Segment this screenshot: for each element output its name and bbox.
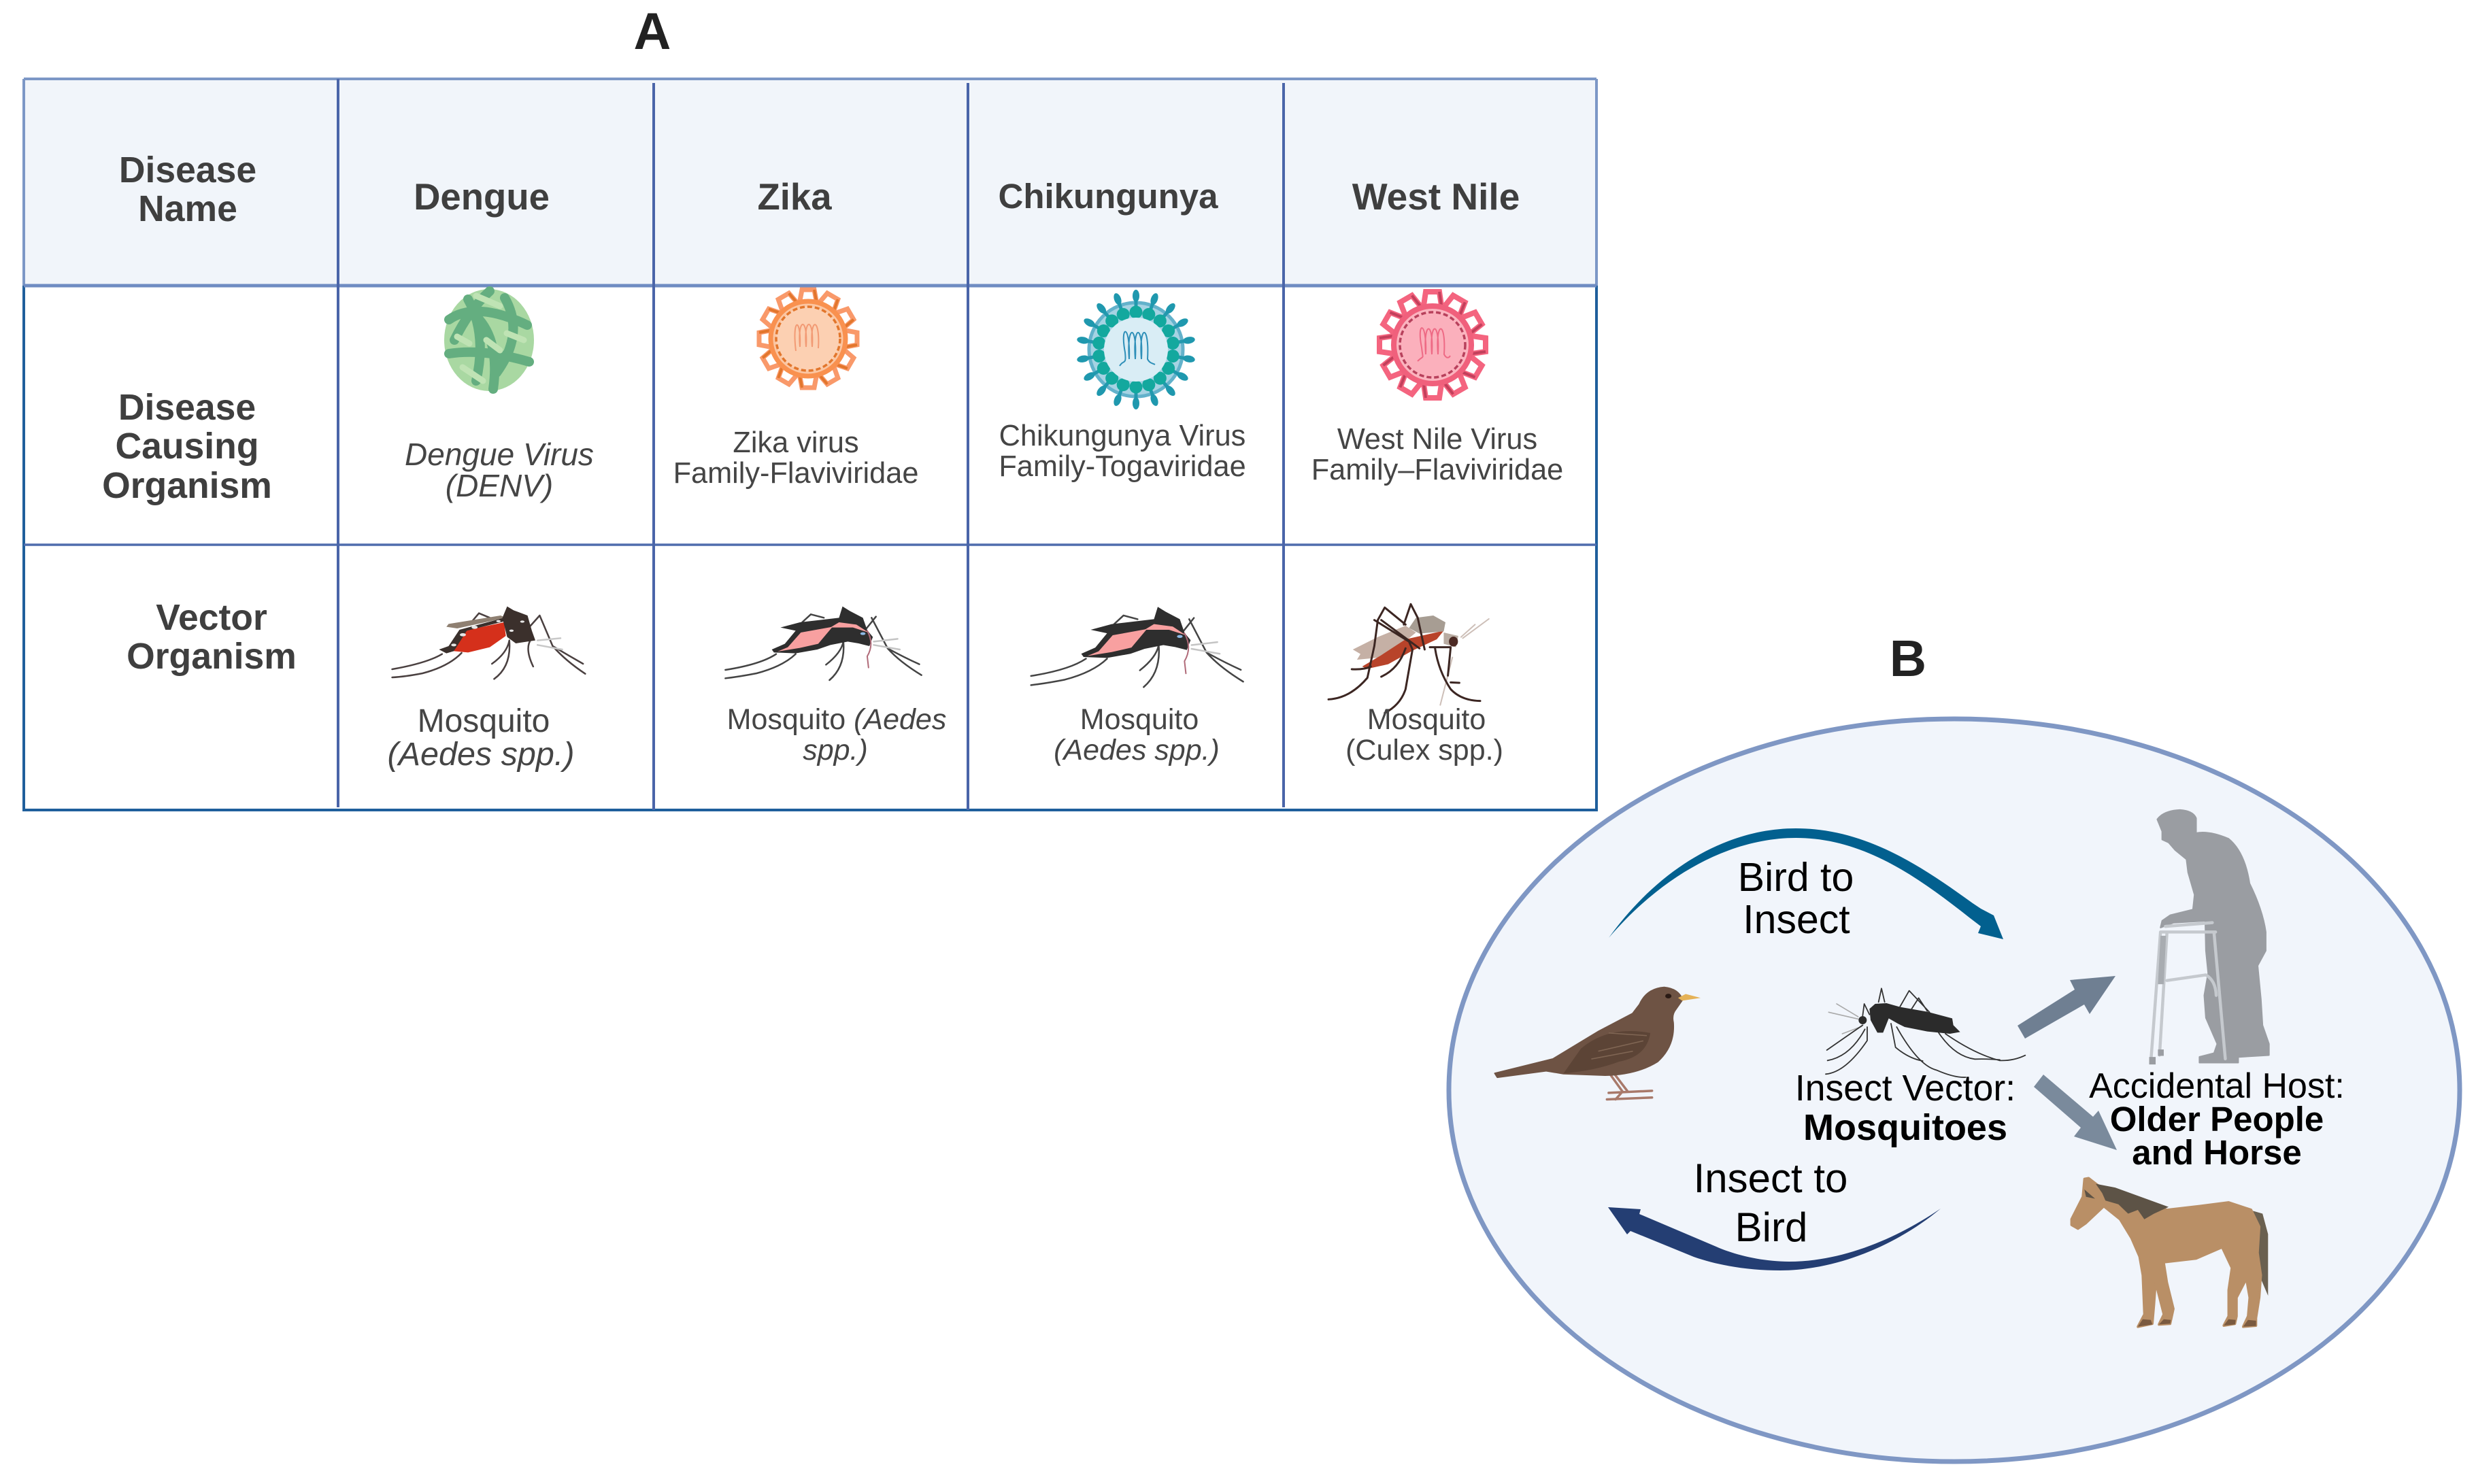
- text: zika virus: Zika virus: [733, 426, 859, 459]
- column header: West Nile: West Nile: [1352, 175, 1520, 218]
- icon: older person with walker: [2149, 810, 2269, 1064]
- text: mosquito, aedes (zika): Mosquito (Aedes: [727, 703, 946, 736]
- text: dengue virus: Dengue Virus: [405, 437, 594, 472]
- row header: Disease Causing Organism: Disease: [118, 388, 256, 428]
- panel label: A: A: [634, 3, 671, 61]
- arrow: to older person: [2018, 976, 2115, 1039]
- table header background: [24, 79, 1596, 286]
- text: chikungunya virus: Family-Togaviridae: [999, 450, 1246, 483]
- panel A: disease table: [24, 79, 1596, 810]
- row header: Vector Organism: Organism: [127, 637, 297, 677]
- text: bird to insect: Bird to: [1738, 855, 1854, 900]
- icon: zika virus: [759, 290, 857, 388]
- row header: Disease Causing Organism: Causing: [115, 426, 259, 467]
- text: accidental host: Accidental Host:: [2089, 1066, 2345, 1106]
- text: dengue virus: (DENV): [446, 468, 553, 503]
- icon: mosquito, red abdomen: [392, 607, 585, 679]
- panel B: transmission cycle: [1449, 719, 2460, 1462]
- text: mosquito, aedes (chikungunya): (Aedes spp.): [1054, 734, 1220, 766]
- transmission ellipse: [1449, 719, 2460, 1462]
- arrow: bird to insect: [1609, 828, 2003, 939]
- icon: mosquito, pink abdomen: [725, 607, 922, 680]
- column header: Dengue: Dengue: [414, 176, 550, 218]
- icon: west nile virus: [1379, 292, 1486, 398]
- icon: dengue virus: [444, 289, 534, 391]
- text: mosquito, aedes (dengue): Mosquito: [418, 703, 550, 739]
- row header: Disease Name: Name: [138, 189, 237, 229]
- icon: chikungunya virus: [1076, 290, 1196, 409]
- icon: black mosquito: [1826, 988, 2025, 1077]
- text: insect vector: Mosquitoes: [1803, 1107, 2007, 1148]
- icon: mosquito, pink abdomen (chikungunya): [1031, 607, 1243, 687]
- icon: bird: [1495, 988, 1701, 1099]
- text: accidental host: Older People: [2110, 1100, 2324, 1139]
- text: mosquito, aedes (dengue): (Aedes spp.): [388, 736, 574, 773]
- icon: culex mosquito: [1328, 604, 1489, 713]
- column header: Chikungunya: Chikungunya: [998, 177, 1218, 216]
- column header: Zika: Zika: [757, 176, 832, 218]
- text: insect to bird: Bird: [1735, 1204, 1807, 1250]
- panel label: B: B: [1890, 630, 1926, 687]
- text: insect to bird: Insect to: [1694, 1156, 1847, 1201]
- arrow: insect to bird: [1608, 1207, 1941, 1270]
- text: mosquito, aedes (chikungunya): Mosquito: [1080, 703, 1199, 736]
- text: mosquito, aedes (zika): spp.): [803, 734, 868, 766]
- arrow: to horse: [2034, 1075, 2117, 1150]
- text: mosquito, culex (west nile): (Culex spp.): [1345, 734, 1503, 766]
- row header: Disease Name: Disease: [119, 150, 256, 190]
- row header: Vector Organism: Vector: [156, 598, 267, 638]
- text: west nile virus: West Nile Virus: [1337, 423, 1537, 456]
- text: insect vector: Insect Vector:: [1795, 1068, 2015, 1109]
- text: mosquito, culex (west nile): Mosquito: [1367, 703, 1486, 736]
- text: zika virus: Family-Flaviviridae: [673, 457, 918, 490]
- row header: Disease Causing Organism: Organism: [102, 466, 272, 506]
- icon: horse: [2071, 1178, 2268, 1327]
- text: chikungunya virus: Chikungunya Virus: [999, 420, 1245, 452]
- text: accidental host: and Horse: [2132, 1133, 2302, 1172]
- text: west nile virus: Family–Flaviviridae: [1311, 454, 1563, 486]
- text: bird to insect: Insect: [1743, 897, 1850, 942]
